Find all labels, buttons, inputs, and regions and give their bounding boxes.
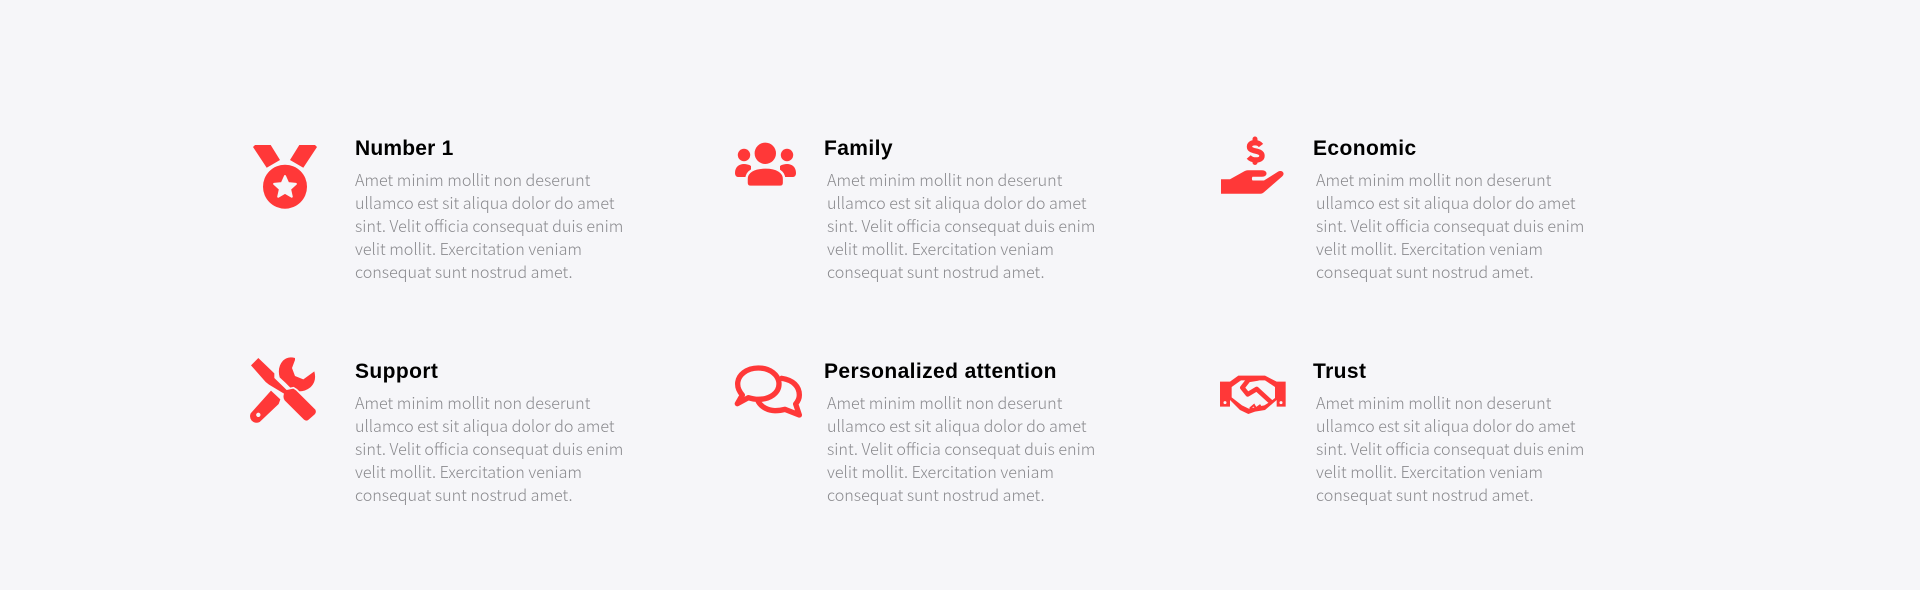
heading: Personalized attention: Personalized attention — [824, 360, 1057, 383]
panel: Trust — [1220, 360, 1584, 506]
panel: Support — [250, 357, 623, 506]
icon: wrench and screwdriver — [250, 357, 316, 423]
text block: velit mollit. Exercitation veniam — [827, 459, 1054, 483]
text block: ullamco est sit aliqua dolor do amet — [827, 413, 1087, 437]
text block: velit mollit. Exercitation veniam — [1316, 236, 1543, 260]
text block: ullamco est sit aliqua dolor do amet — [1316, 190, 1576, 214]
text block: ullamco est sit aliqua dolor do amet — [355, 413, 615, 437]
text block — [355, 167, 623, 283]
text block: Amet minim mollit non deserunt — [355, 167, 590, 191]
icon: hand with dollar — [1221, 136, 1284, 194]
text block: sint. Velit officia consequat duis enim — [1316, 436, 1584, 460]
panel: Family — [735, 137, 1095, 283]
text block: Amet minim mollit non deserunt — [827, 390, 1062, 414]
text block: Amet minim mollit non deserunt — [1316, 167, 1551, 191]
text block: consequat sunt nostrud amet. — [355, 259, 572, 283]
text block: ullamco est sit aliqua dolor do amet — [355, 190, 615, 214]
text block: velit mollit. Exercitation veniam — [1316, 459, 1543, 483]
heading: Economic: Economic — [1313, 137, 1417, 160]
text block — [355, 390, 623, 506]
text block — [827, 167, 1095, 283]
text block: consequat sunt nostrud amet. — [827, 482, 1044, 506]
text block: ullamco est sit aliqua dolor do amet — [827, 190, 1087, 214]
text block: Amet minim mollit non deserunt — [827, 167, 1062, 191]
icon: speech bubbles — [734, 365, 802, 418]
icon: family group — [735, 142, 796, 186]
heading: Support: Support — [355, 360, 438, 383]
text block: velit mollit. Exercitation veniam — [355, 236, 582, 260]
text block: sint. Velit officia consequat duis enim — [827, 213, 1095, 237]
panel: Personalized attention — [734, 360, 1095, 506]
text block — [1316, 167, 1584, 283]
text block: velit mollit. Exercitation veniam — [827, 236, 1054, 260]
text block: sint. Velit officia consequat duis enim — [355, 436, 623, 460]
text block: consequat sunt nostrud amet. — [1316, 259, 1533, 283]
text block: sint. Velit officia consequat duis enim — [355, 213, 623, 237]
text block: Amet minim mollit non deserunt — [355, 390, 590, 414]
text block — [1316, 390, 1584, 506]
panel: Economic — [1221, 136, 1584, 283]
text block: sint. Velit officia consequat duis enim — [827, 436, 1095, 460]
heading: Number 1: Number 1 — [355, 137, 453, 160]
heading: Family: Family — [824, 137, 893, 160]
icon: medal — [253, 145, 317, 209]
text block: sint. Velit officia consequat duis enim — [1316, 213, 1584, 237]
text block: velit mollit. Exercitation veniam — [355, 459, 582, 483]
heading: Trust: Trust — [1313, 360, 1366, 383]
panel: Number 1 — [253, 137, 623, 283]
text block — [827, 390, 1095, 506]
text block: consequat sunt nostrud amet. — [827, 259, 1044, 283]
text block: Amet minim mollit non deserunt — [1316, 390, 1551, 414]
icon: handshake — [1220, 376, 1286, 414]
text block: consequat sunt nostrud amet. — [1316, 482, 1533, 506]
text block: ullamco est sit aliqua dolor do amet — [1316, 413, 1576, 437]
text block: consequat sunt nostrud amet. — [355, 482, 572, 506]
